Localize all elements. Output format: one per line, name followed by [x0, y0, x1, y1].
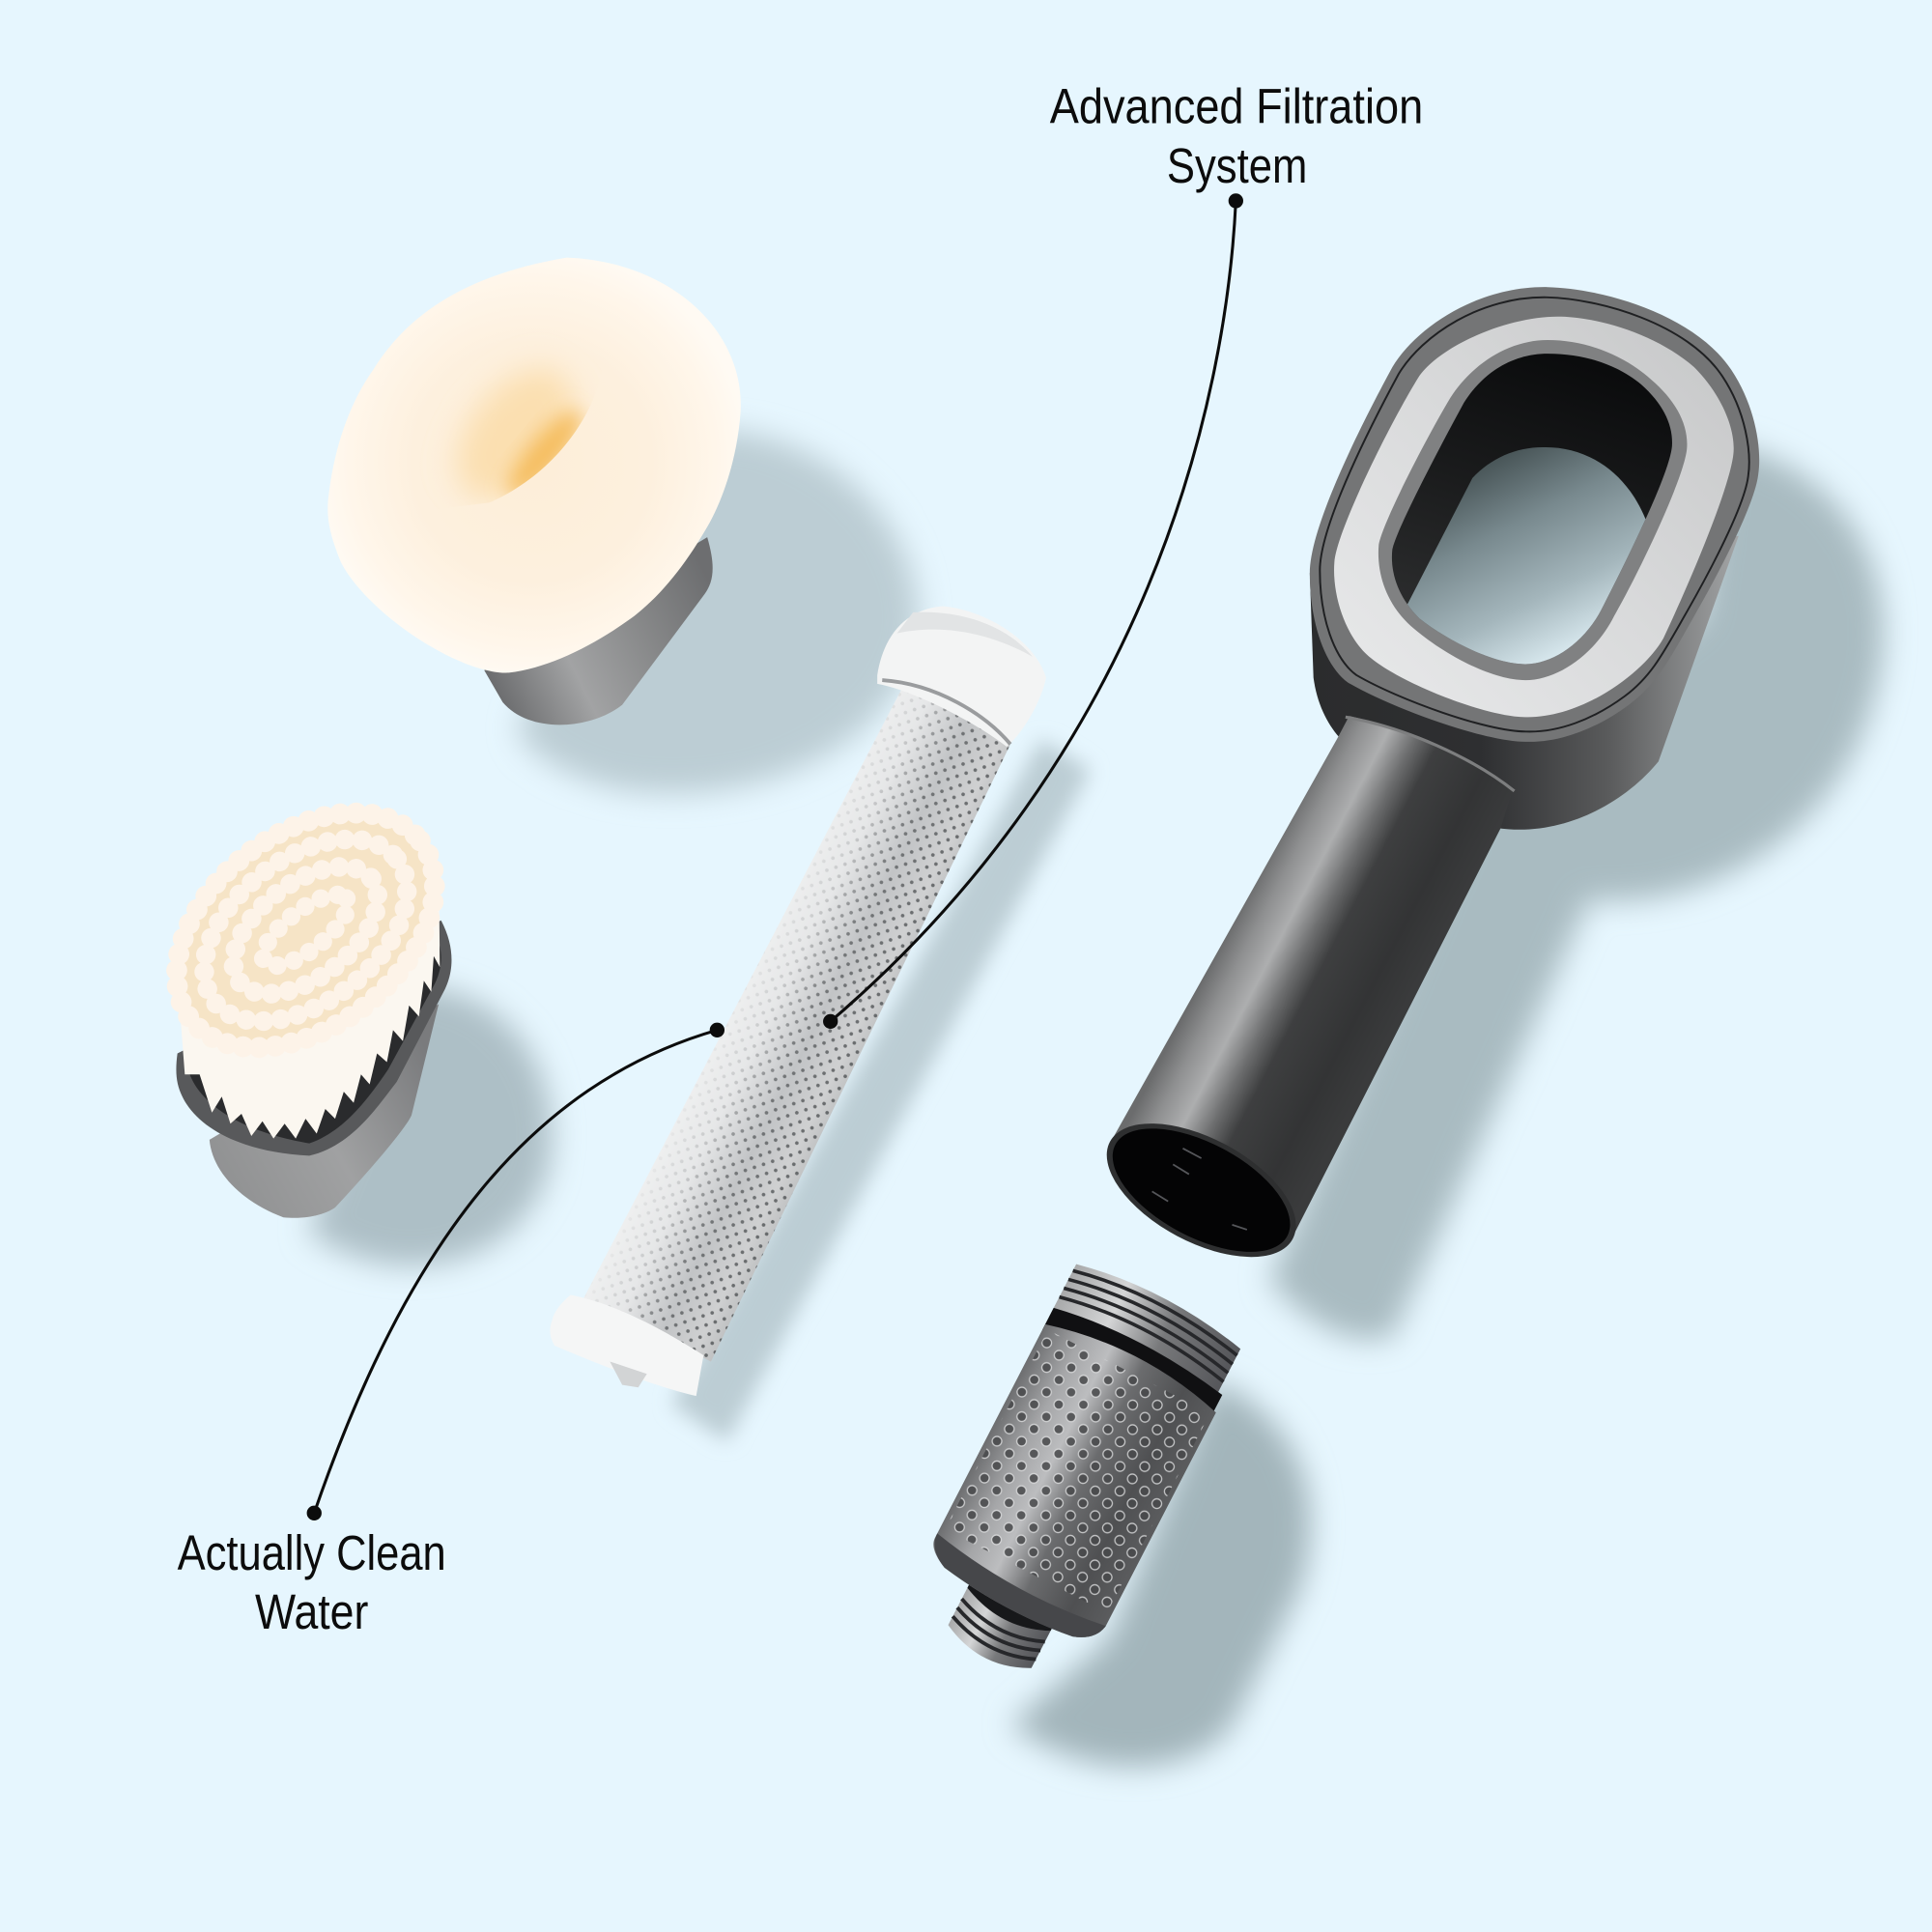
- cast shadows: [308, 430, 1884, 1767]
- filter top cap: [877, 607, 1046, 747]
- head spray face: [1310, 287, 1759, 742]
- brush bristle top: [129, 763, 481, 1097]
- callout: advanced filtration system: [823, 79, 1423, 1029]
- callout: actually clean water: [178, 1023, 724, 1639]
- connector lower band: [922, 1533, 1108, 1652]
- sponge: [327, 258, 741, 673]
- handle: [1086, 716, 1515, 1285]
- filter body: [582, 681, 1012, 1361]
- leader line: [314, 1030, 717, 1513]
- leader start dot: [1229, 193, 1243, 209]
- sponge base: [484, 537, 713, 724]
- label: Advanced Filtration: [1050, 79, 1423, 134]
- infographic canvas: [166, 87, 1899, 1783]
- shower head: [1086, 287, 1759, 1285]
- label: System: [1167, 138, 1307, 193]
- label: Water: [255, 1584, 368, 1639]
- sponge attachment: [327, 258, 741, 724]
- head inner rim: [1378, 340, 1687, 680]
- brush dish: [176, 921, 451, 1155]
- leader end dot: [823, 1014, 838, 1029]
- threaded connector: [896, 1256, 1252, 1700]
- brush dish interior: [187, 930, 441, 1144]
- filter bottom cap: [550, 1295, 703, 1396]
- handle opening: [1086, 1096, 1317, 1285]
- connector upper thread: [1042, 1256, 1249, 1417]
- connector lower thread: [943, 1562, 1065, 1679]
- brush bristle sides: [180, 863, 440, 1139]
- label: Actually Clean: [178, 1525, 446, 1580]
- brush attachment: [129, 763, 481, 1218]
- leader start dot: [710, 1023, 724, 1037]
- leader end dot: [307, 1506, 322, 1520]
- head body: [1310, 536, 1739, 830]
- head opening: [1392, 354, 1672, 678]
- brush base: [210, 1005, 439, 1218]
- connector perforations: [945, 1330, 1209, 1613]
- sponge hole: [446, 358, 590, 504]
- leader line: [831, 201, 1236, 1021]
- filter cartridge: [550, 607, 1046, 1396]
- filter mesh: [582, 681, 1012, 1361]
- connector body: [922, 1313, 1222, 1652]
